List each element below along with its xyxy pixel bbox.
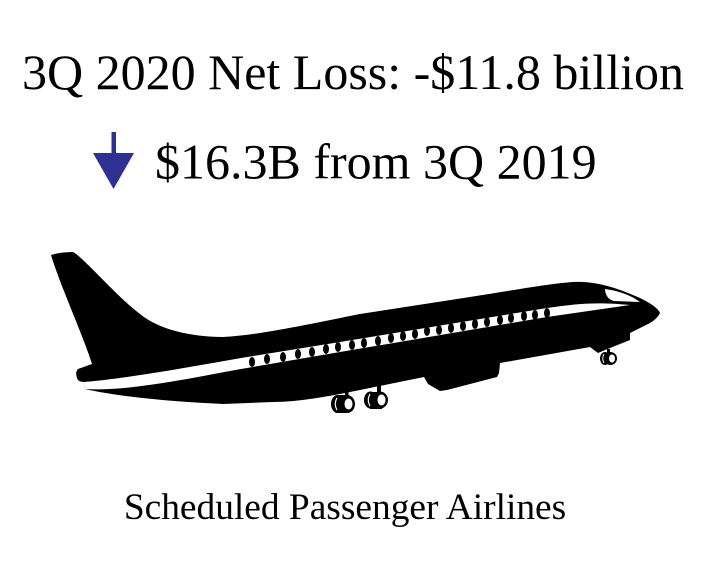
- cabin windows: [249, 308, 550, 367]
- rear landing gear left: [331, 388, 355, 413]
- airplane body: [51, 252, 660, 404]
- caption: scheduled passenger airlines: Scheduled Passenger Airlines: [124, 487, 566, 528]
- icon: down arrow: [93, 132, 134, 189]
- nose landing gear: [600, 349, 617, 365]
- rear landing gear right: [364, 384, 388, 409]
- subtitle: change from 3Q 2019: $16.3B from 3Q 2019: [155, 134, 597, 190]
- title: net loss: 3Q 2020 Net Loss: -$11.8 billion: [22, 44, 684, 100]
- icon: airplane silhouette: [51, 252, 660, 413]
- cockpit windshield: [605, 289, 640, 302]
- white fuselage stripe: [84, 303, 630, 389]
